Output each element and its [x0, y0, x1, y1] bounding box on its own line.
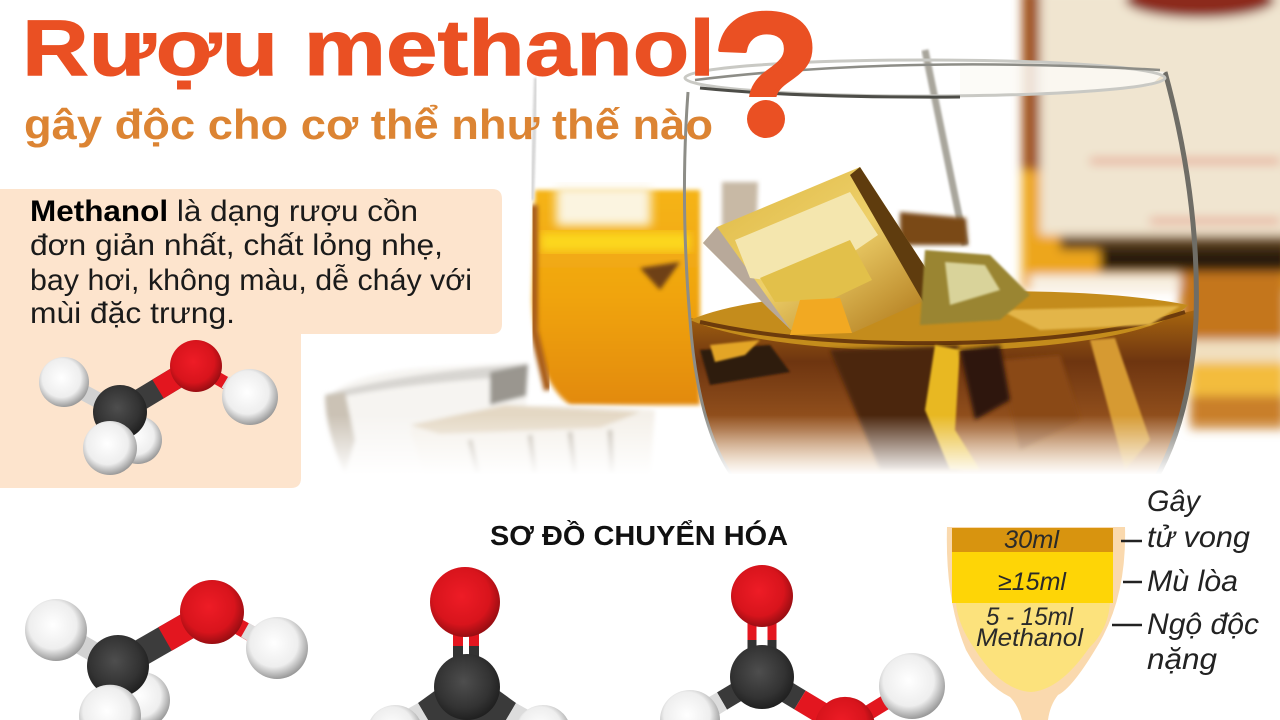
definition text: Methanol là dạng rượu cồn: [30, 195, 418, 228]
definition text: bay hơi, không màu, dễ cháy với: [30, 264, 472, 297]
ice cubes on table: [325, 362, 655, 478]
dose labels: ≥15ml: [998, 568, 1067, 596]
effect labels: Ngộ độc: [1147, 608, 1259, 641]
band: 5-15ml: [956, 603, 1110, 692]
glass outline and rim: [684, 92, 735, 480]
definition text: mùi đặc trưng.: [30, 297, 235, 330]
connector lines: [1112, 541, 1142, 625]
molecule: formaldehyde: [370, 567, 568, 720]
dose labels: 5 - 15ml: [986, 603, 1074, 631]
dose labels: Methanol: [976, 624, 1084, 652]
ice in glass: [703, 167, 942, 333]
definition text: [30, 195, 472, 330]
back bottle: [1022, 0, 1280, 430]
heading: metabolism diagram: SƠ ĐỒ CHUYỂN HÓA: [490, 520, 788, 551]
chart: methanol dose glass: [947, 485, 1259, 720]
liquid: [690, 310, 1196, 482]
band: 30ml: [952, 528, 1113, 552]
molecule: formic acid: [660, 565, 945, 720]
question mark: [718, 10, 812, 138]
title: Rượu methanol: [22, 3, 715, 92]
effect labels: nặng: [1147, 643, 1217, 676]
definition text: đơn giản nhất, chất lỏng nhẹ,: [30, 229, 443, 262]
effect labels: tử vong: [1147, 521, 1250, 554]
effect labels: Mù lòa: [1147, 565, 1238, 598]
background photo: whisky glasses and bottle: [300, 0, 1280, 490]
effect labels: [1147, 485, 1259, 676]
bottom fade: [300, 415, 1280, 475]
panel: methanol definition: [0, 189, 502, 488]
molecule: methanol: [25, 580, 308, 720]
back glass: [532, 50, 968, 405]
subtitle: gây độc cho cơ thể như thế nào: [24, 101, 713, 148]
glass outline and stem: [947, 527, 1125, 720]
front glass with whisky: [684, 60, 1196, 482]
effect labels: Gây: [1147, 485, 1202, 518]
icon: small methanol molecule: [39, 340, 278, 475]
dose labels: 30ml: [1004, 526, 1060, 554]
band: 15ml: [952, 552, 1113, 603]
dose labels: [976, 526, 1084, 652]
